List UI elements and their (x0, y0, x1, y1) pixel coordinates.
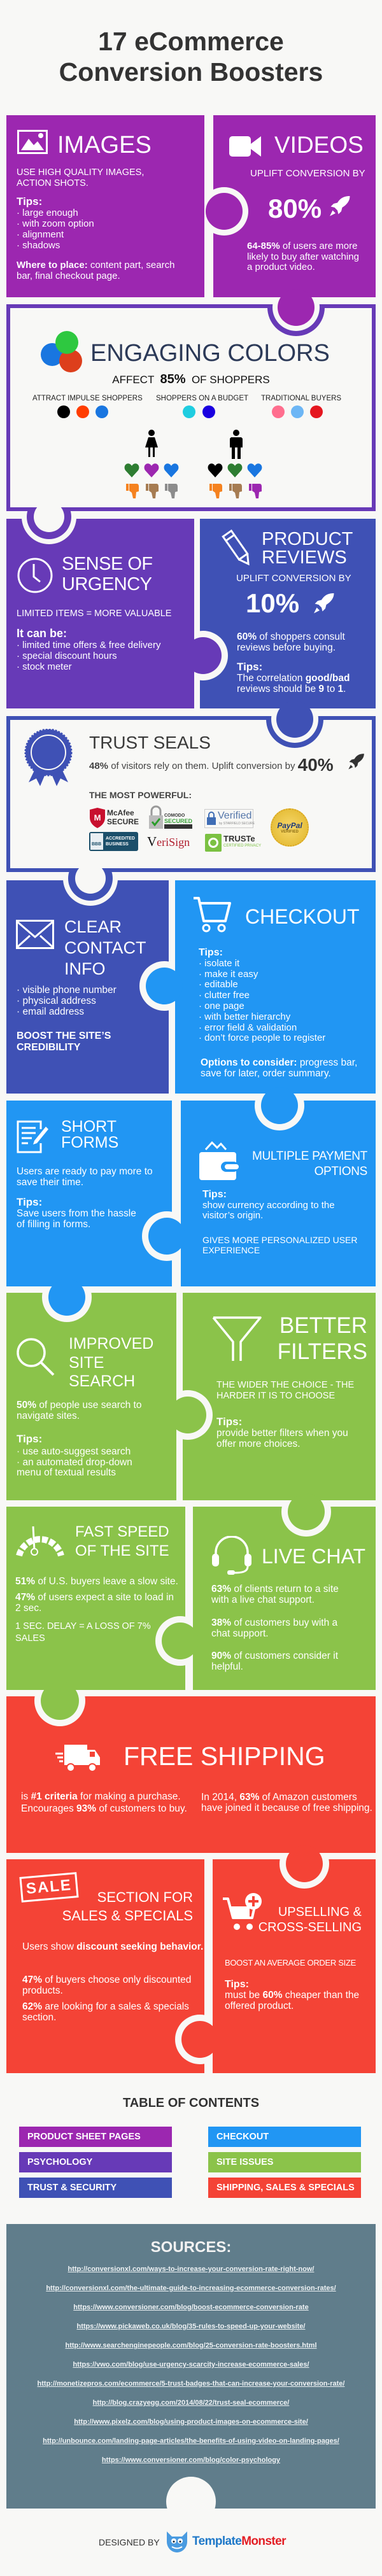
text: most powerful: THE MOST POWERFUL: (89, 790, 192, 800)
text: video stat: a product video. (247, 262, 315, 272)
list: contact: · visible phone number (17, 985, 117, 996)
tips: short forms (17, 1197, 136, 1230)
list: sources: https://www.pickaweb.co.uk/blog/35-rules-to-speed-up-your-website/ (77, 2323, 305, 2330)
heading: improved site search: IMPROVED (69, 1335, 153, 1353)
text: personalized: GIVES MORE PERSONALIZED USER (202, 1235, 358, 1245)
text: uplift: UPLIFT CONVERSION BY (236, 573, 351, 584)
text: search stat: 50% of people use search to (17, 1400, 141, 1411)
list: sources: http://unbounce.com/landing-page-articles/the-benefits-of-using-video-on-landing-pages/ (43, 2437, 339, 2445)
stat: 10%: 10% (246, 588, 299, 618)
text: discount seeking: Users show discount seeking behavior. (22, 1941, 203, 1952)
panel: improved site search: · an automated drop-down (17, 1456, 132, 1468)
footer: designed by (99, 2530, 290, 2554)
list: sources: https://www.conversioner.com/blog/color-psychology (102, 2456, 280, 2464)
tips: payment (202, 1190, 335, 1221)
icon: award badge (24, 729, 73, 786)
footer: designed by: DESIGNED BY (99, 2537, 160, 2547)
panel: videos (213, 115, 376, 297)
icon: sale stamp: SALE (25, 1876, 73, 1897)
panel: live chat: 38% of customers buy with a (211, 1617, 337, 1628)
color dots (57, 405, 323, 418)
logo: comodo: COMODO (164, 813, 185, 818)
tips: reviews: reviews should be 9 to 1. (237, 684, 346, 694)
icon: color circles (41, 331, 82, 372)
logo: bbb: BUSINESS (106, 842, 129, 847)
text: options: Options to consider: progress bar, (201, 1057, 357, 1068)
list: it can be: It can be: (17, 627, 67, 640)
text: images: USE HIGH QUALITY IMAGES, (17, 167, 144, 178)
heading: fast speed of the site (75, 1523, 169, 1561)
list: sources: http://conversionxl.com/the-ultimate-guide-to-increasing-ecommerce-conversion-rates/ (46, 2284, 336, 2292)
text: boost credibility: BOOST THE SITE’S (17, 1031, 111, 1041)
icon: form (17, 1120, 50, 1153)
list: sources: http://monetizepros.com/ecommerce/5-trust-badges-that-can-increase-your-conversion-rate/ (38, 2380, 344, 2388)
icon: speedometer (15, 1524, 65, 1557)
heading: short forms: SHORT (61, 1118, 117, 1136)
text: short forms: Users are ready to pay more to (17, 1166, 153, 1177)
tips: upselling (225, 1979, 359, 2011)
tips: images: Tips: (17, 195, 42, 208)
text: boost credibility: CREDIBILITY (17, 1042, 80, 1053)
logo: paypal verified: VERIFIED (281, 830, 299, 834)
tips: checkout: Tips: (199, 947, 223, 958)
heading: videos: VIDEOS (274, 132, 364, 158)
heading: short forms: FORMS (61, 1134, 118, 1151)
panel: sources (6, 2224, 376, 2509)
tips: checkout (199, 947, 325, 1043)
icon: truck (55, 1745, 101, 1773)
heading: live chat: LIVE CHAT (262, 1545, 365, 1568)
where to place: bar, final checkout page. (17, 271, 120, 281)
tips: filters: provide better filters when you (216, 1428, 348, 1439)
list: sources: http://www.pixelz.com/blog/using-product-images-on-ecommerce-site/ (74, 2418, 308, 2426)
knob: improved into filters (169, 1397, 206, 1433)
panel: live chat: helpful. (211, 1661, 243, 1672)
panel: live chat: chat support. (211, 1628, 269, 1639)
heading: better filters (278, 1313, 367, 1365)
heading: product reviews: REVIEWS (262, 547, 347, 568)
text: sales stats: 47% of buyers choose only discounted (22, 1974, 191, 1985)
heading: sense of urgency: URGENCY (62, 574, 152, 595)
heading: upselling (258, 1904, 362, 1935)
tips: checkout: · editable (199, 979, 238, 990)
knob: checkout into contact (146, 968, 183, 1004)
heading: sense of urgency (62, 554, 153, 595)
text: reviews stats (237, 631, 345, 653)
panel: upselling & cross-selling (213, 1859, 376, 2073)
tips: checkout: · clutter free (199, 990, 250, 1001)
text: video stat: 64-85% of users are more (247, 241, 357, 251)
knob: payment into short forms (148, 1218, 185, 1255)
icon: clock (18, 558, 52, 593)
list: it can be: · special discount hours (17, 651, 117, 661)
tips: payment: visitor’s origin. (202, 1210, 263, 1221)
panel: fast speed (6, 1507, 185, 1690)
knob: videos into engaging (278, 289, 315, 326)
heading: fast speed of the site: OF THE SITE (75, 1542, 169, 1559)
text: chat stats: 63% of clients return to a site (211, 1584, 339, 1594)
list: sources: http://blog.crazyegg.com/2014/08/22/trust-seal-ecommerce/ (93, 2399, 289, 2407)
tips: checkout: · with better hierarchy (199, 1011, 290, 1022)
text: uplift: UPLIFT CONVERSION BY (250, 168, 365, 179)
tips: checkout: · don’t force people to register (199, 1032, 325, 1043)
icon: headset (211, 1536, 253, 1575)
text: reviews stats: 60% of shoppers consult (237, 631, 345, 642)
knob: upselling into sales (181, 2021, 218, 2058)
toc: boxes: SHIPPING, SALES & SPECIALS (216, 2183, 355, 2193)
text: shipping left (21, 1791, 187, 1815)
heading: improved site search: SITE (69, 1353, 104, 1371)
logo: comodo: SECURED (164, 818, 192, 824)
heading: free shipping: FREE SHIPPING (124, 1742, 325, 1771)
text: images (17, 167, 144, 188)
tips: upselling: must be 60% cheaper than the (225, 1990, 359, 2001)
toc: boxes: TRUST & SECURITY (27, 2183, 117, 2193)
tips: filters (216, 1416, 348, 1449)
tips: reviews (237, 661, 350, 694)
tips: short forms: of filling in forms. (17, 1219, 90, 1230)
heading: multiple payment options: MULTIPLE PAYMENT (252, 1150, 367, 1163)
text: reviews stats: reviews before buying. (237, 642, 336, 653)
logo: paypal verified: PayPal (277, 821, 302, 830)
tips: images: · alignment (17, 229, 64, 240)
icon: woman (145, 430, 158, 457)
heading: clear contact info: INFO (64, 959, 106, 978)
knob: urgency into reviews (185, 637, 222, 674)
panel: fast speed: 1 SEC. DELAY = A LOSS OF 7% (15, 1621, 151, 1631)
panel: images (6, 115, 204, 297)
text: shipping right: In 2014, 63% of Amazon customers (201, 1792, 357, 1803)
logo: bbb (89, 832, 138, 851)
text: speed stats: 51% of U.S. buyers leave a slow site. (15, 1576, 178, 1587)
heading: table of contents: TABLE OF CONTENTS (123, 2096, 259, 2110)
tips: checkout: · isolate it (199, 958, 239, 969)
tips: images (17, 195, 94, 251)
panel: clear contact info (6, 880, 169, 1094)
tips: filters: offer more choices. (216, 1439, 301, 1449)
heading: checkout: CHECKOUT (245, 905, 360, 928)
icon: sale stamp (19, 1872, 79, 1903)
heading: sources: SOURCES: (151, 2239, 231, 2256)
heading: improved site search: SEARCH (69, 1372, 135, 1390)
icon: man (230, 430, 243, 459)
logo: mcafee (90, 808, 139, 828)
tips: upselling: Tips: (225, 1979, 249, 1990)
panel: live chat: 90% of customers consider it (211, 1650, 338, 1661)
tips: search: Tips: (17, 1433, 42, 1445)
heading: sales & specials: SECTION FOR (97, 1889, 193, 1905)
icon: monster logo (164, 2530, 190, 2553)
panel: short forms (6, 1101, 172, 1286)
logo: truste (205, 834, 261, 852)
knob: chat into fast (162, 1622, 199, 1659)
panel: better filters (183, 1293, 376, 1500)
heading: short forms (61, 1119, 118, 1151)
heading: better filters: BETTER (279, 1313, 367, 1338)
text: short forms: save their time. (17, 1177, 83, 1188)
tips: payment: Tips: (202, 1189, 227, 1200)
toc: boxes (19, 2127, 361, 2198)
where to place: Where to place: content part, search (17, 260, 174, 271)
tips: short forms: Save users from the hassle (17, 1208, 136, 1219)
panel: live chat (193, 1507, 376, 1690)
thumbs down (126, 484, 262, 498)
icon: rocket (330, 196, 350, 216)
knob: checkout into payment (261, 1087, 298, 1124)
icon: cart plus (222, 1892, 264, 1934)
hearts (125, 463, 262, 477)
tips: upselling: offered product. (225, 2001, 294, 2011)
logo: truste: TRUSTe (223, 834, 255, 843)
tips: payment: show currency according to the (202, 1199, 335, 1211)
heading: clear contact info (64, 917, 146, 978)
panel: improved site search (6, 1293, 176, 1500)
text: video stat: likely to buy after watching (247, 251, 359, 262)
panel: sales & specials: section. (22, 2012, 56, 2023)
title: 17 eCommerce (98, 27, 284, 56)
list: sources: https://vwo.com/blog/use-urgency-scarcity-increase-ecommerce-sales/ (73, 2361, 309, 2368)
tips: images: · shadows (17, 240, 60, 251)
heading: sense of urgency: SENSE OF (62, 554, 153, 574)
panel: engaging colors: TRADITIONAL BUYERS (261, 395, 341, 402)
heading: upselling: CROSS-SELLING (258, 1920, 362, 1934)
icon: funnel (212, 1316, 262, 1362)
logo: verified (204, 809, 253, 828)
text: personalized (202, 1235, 358, 1255)
knob: short into improved (48, 1279, 85, 1316)
tips: checkout: · one page (199, 1001, 244, 1011)
list: sources (6, 2260, 376, 2470)
panel: sense of urgency (6, 519, 194, 708)
text: wider choice: HARDER IT IS TO CHOOSE (216, 1391, 335, 1401)
logo: bbb: BBB (92, 842, 101, 847)
panel: product reviews (200, 519, 376, 708)
knob: shipping into upselling (286, 1845, 323, 1882)
list: sources: http://conversionxl.com/ways-to-increase-your-conversion-rate-right-now/ (68, 2265, 314, 2273)
tips: images: · large enough (17, 208, 78, 218)
text: chat stats: with a live chat support. (211, 1594, 315, 1605)
icon: image (17, 130, 48, 154)
text: sales stats (22, 1974, 191, 1996)
panel: engaging colors: SHOPPERS ON A BUDGET (156, 395, 248, 402)
list: contact: · physical address (17, 996, 96, 1006)
tips: images: · with zoom option (17, 218, 94, 229)
heading: clear contact info: CLEAR (64, 917, 122, 936)
tips: short forms: Tips: (17, 1196, 42, 1208)
icon: cart (194, 897, 231, 932)
text: wider choice (216, 1380, 354, 1402)
where to place (17, 260, 174, 281)
text: limited items: LIMITED ITEMS = MORE VALUABLE (17, 609, 171, 619)
list: it can be: · stock meter (17, 661, 72, 672)
heading: fast speed of the site: FAST SPEED (75, 1523, 169, 1540)
logos: trust seals (89, 806, 261, 852)
knob: fast into shipping (41, 1682, 79, 1720)
text: boost order size: BOOST AN AVERAGE ORDER SIZE (225, 1958, 356, 1967)
knob: engaging into urgency (27, 507, 71, 539)
footer: designed by: TemplateMonster (192, 2535, 286, 2548)
heading: upselling: UPSELLING & (278, 1905, 362, 1919)
toc: boxes: CHECKOUT (216, 2132, 269, 2142)
logo: comodo (149, 806, 192, 829)
logo: bbb: ACCREDITED (106, 836, 135, 841)
title: Conversion Boosters (59, 57, 323, 87)
knob: filters into chat (288, 1493, 325, 1530)
panel: trust seals (6, 716, 376, 872)
text: shipping left: Encourages 93% of customers to buy. (21, 1803, 187, 1814)
toc: boxes: PRODUCT SHEET PAGES (27, 2132, 141, 2142)
list: it can be (17, 627, 160, 672)
heading: engaging colors: ENGAGING COLORS (90, 340, 330, 367)
text: short forms (17, 1166, 153, 1188)
panel: fast speed: 47% of users expect a site to load in (15, 1592, 174, 1603)
list: sources: http://www.searchenginepeople.com/blog/25-conversion-rate-boosters.html (65, 2342, 317, 2349)
logo: verified: Verified (218, 810, 251, 821)
tips: checkout: · make it easy (199, 969, 258, 980)
icon: rocket (314, 593, 334, 614)
heading: trust seals: TRUST SEALS (89, 733, 211, 752)
logo: mcafee: McAfee (107, 808, 134, 817)
list: contact: · email address (17, 1006, 84, 1017)
heading: better filters: FILTERS (278, 1339, 367, 1364)
tips: reviews: The correlation good/bad (237, 673, 350, 684)
icon: pencil (222, 530, 250, 565)
heading: improved site search (69, 1335, 153, 1391)
stat: 80%: 80% (268, 194, 322, 223)
toc: boxes: PSYCHOLOGY (27, 2157, 92, 2167)
heading: multiple payment options: OPTIONS (315, 1165, 367, 1178)
text: search stat: navigate sites. (17, 1411, 80, 1421)
tips: checkout: · error field & validation (199, 1022, 297, 1033)
text: search stat (17, 1400, 141, 1421)
panel: engaging colors (6, 304, 376, 511)
icon: wallet (199, 1141, 239, 1180)
panel: fast speed: 2 sec. (15, 1603, 41, 1614)
heading: clear contact info: CONTACT (64, 938, 146, 957)
text: personalized: EXPERIENCE (202, 1245, 260, 1255)
heading: images: IMAGES (57, 132, 152, 158)
text: chat stats (211, 1584, 339, 1605)
text: shipping right: have joined it because of free shipping. (201, 1803, 372, 1813)
text: shipping left: is #1 criteria for making a purchase. (21, 1791, 181, 1802)
heading: multiple payment options (252, 1149, 367, 1179)
icon: rocket dark (348, 754, 364, 770)
text: options (201, 1057, 357, 1079)
logo: paypal verified (271, 808, 309, 847)
text: options: save for later, order summary. (201, 1068, 331, 1079)
panel: improved site search: · use auto-suggest search (17, 1446, 131, 1457)
logo: mcafee: SECURE (107, 817, 139, 826)
heading: sales & specials: SALES & SPECIALS (62, 1908, 193, 1924)
toc: boxes: SITE ISSUES (216, 2157, 273, 2167)
logo: verified: by STARFIELD SECURE (219, 822, 255, 826)
icon: envelope (16, 920, 54, 949)
panel: sales & specials: 62% are looking for a sales & specials (22, 2001, 189, 2012)
list: contact (17, 985, 117, 1017)
text: boost credibility (17, 1031, 111, 1053)
text: images: ACTION SHOTS. (17, 178, 88, 188)
knob: images to videos (206, 193, 243, 230)
knob: trust into contact (68, 868, 113, 901)
panel: checkout (175, 880, 376, 1094)
logo: mcafee: M (94, 813, 101, 822)
logo: verisign: VeriSign (147, 834, 190, 849)
tips: reviews: Tips: (237, 661, 262, 673)
panel: free shipping (6, 1696, 376, 1853)
heading: product reviews: PRODUCT (262, 529, 353, 549)
heading: product reviews (262, 529, 353, 568)
icon: video camera (229, 136, 261, 157)
tips: filters: Tips: (216, 1416, 242, 1428)
text: affect 85%: AFFECT 85% OF SHOPPERS (112, 372, 270, 386)
panel: multiple payment options (181, 1101, 376, 1286)
panel: fast speed: SALES (15, 1633, 45, 1643)
panel: sales & specials (6, 1859, 204, 2073)
icon: magnifier (16, 1337, 55, 1377)
knob: reviews into trust (276, 701, 313, 738)
list: sources: https://www.conversioner.com/blog/boost-ecommerce-conversion-rate (73, 2304, 309, 2311)
title (59, 27, 323, 87)
logo: truste: CERTIFIED PRIVACY (223, 844, 261, 848)
labels: shopper types: ATTRACT IMPULSE SHOPPERS (32, 395, 143, 402)
heading: sales & specials (62, 1888, 193, 1925)
text: 48% visitors: 48% of visitors rely on them. Uplift conversion by 40% (89, 755, 334, 775)
list: it can be: · limited time offers & free delivery (17, 640, 160, 651)
text: shipping right (201, 1792, 372, 1813)
text: sales stats: products. (22, 1985, 63, 1996)
text: video stat (247, 241, 359, 272)
text: wider choice: THE WIDER THE CHOICE - THE (216, 1380, 354, 1390)
panel: improved site search: menu of textual results (17, 1467, 116, 1478)
